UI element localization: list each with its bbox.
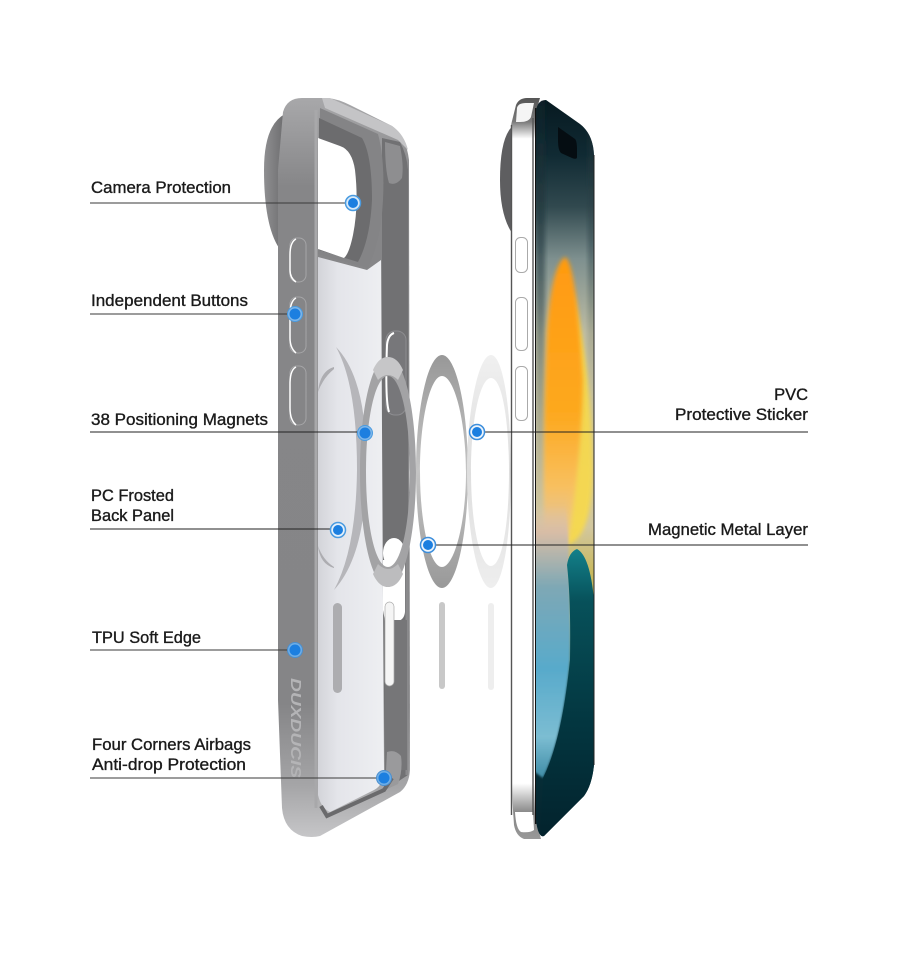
- sticker capsule: [488, 603, 494, 690]
- screen: [536, 100, 594, 836]
- magnet ring: [360, 357, 416, 587]
- screen punch hole: [558, 127, 577, 159]
- callout: Magnetic Metal Layer: Magnetic Metal Layer: [648, 521, 809, 539]
- top lip highlight: [322, 98, 408, 150]
- phone case: [264, 98, 410, 837]
- side button middle: [290, 297, 306, 353]
- case frame: [278, 98, 410, 837]
- camera ring inner: [319, 118, 372, 262]
- side button top: [290, 238, 306, 282]
- panel lower left crescent: [318, 546, 334, 568]
- magnet ring top shine: [373, 357, 403, 380]
- brand logo: DUXDUCIS: [287, 678, 304, 778]
- inner button highlight: [386, 333, 394, 412]
- white capsule: [385, 602, 394, 686]
- panel upper left crescent: [318, 367, 334, 392]
- callout: PVC Protective Sticker: [470, 386, 809, 440]
- phone button top: [516, 238, 528, 272]
- sticker ring: [467, 355, 511, 588]
- right inner side band: [382, 138, 408, 790]
- blue wallpaper shape: [536, 511, 570, 779]
- white strip below magnet: [383, 560, 405, 621]
- camera ring: [318, 108, 383, 268]
- side button middle highlight: [290, 298, 296, 353]
- screen right edge: [593, 155, 595, 765]
- phone camera bump: [500, 125, 514, 233]
- magnet ring bottom shine: [373, 564, 403, 587]
- callout: Four Corners Airbags: Anti-drop Protection: [92, 756, 246, 774]
- phone button middle: [516, 298, 528, 350]
- metal capsule: [439, 602, 445, 689]
- side lines: [512, 118, 533, 815]
- panel magnetic crescent: [334, 347, 366, 590]
- callout: Independent Buttons: Independent Buttons: [91, 292, 248, 310]
- screen edge: [535, 108, 537, 824]
- panel capsule: [333, 603, 342, 693]
- yellow highlight: [566, 290, 593, 545]
- side button bottom highlight: [290, 367, 296, 425]
- magnet ring body: [360, 357, 416, 587]
- side button top highlight: [290, 239, 296, 282]
- corner airbag: [385, 751, 402, 790]
- screen background: [536, 100, 594, 836]
- orange wallpaper shape: [544, 257, 583, 545]
- phone: [500, 95, 600, 840]
- infographic: [90, 98, 808, 839]
- metal ring: [416, 355, 468, 588]
- bottom lip: [321, 778, 392, 816]
- phone button bottom: [516, 366, 528, 420]
- callout: PVC Protective Sticker: PVC: [774, 386, 808, 404]
- hole at strip bottom: [383, 538, 405, 568]
- callout: 38 Positioning Magnets: 38 Positioning Magnets: [91, 411, 268, 429]
- camera opening: [318, 138, 357, 258]
- callout: PC Frosted Back Panel: Back Panel: [91, 507, 174, 525]
- callout: Four Corners Airbags: [90, 736, 392, 786]
- callout: Four Corners Airbags: Four Corners Airbags: [92, 736, 251, 754]
- callout: PC Frosted Back Panel: [90, 487, 346, 538]
- left frame highlight: [314, 110, 318, 808]
- callout: 38 Positioning Magnets: [90, 411, 372, 440]
- callout: Magnetic Metal Layer: [420, 521, 809, 552]
- callout: PVC Protective Sticker: Protective Sticker: [675, 406, 809, 424]
- phone side top window: [516, 103, 534, 122]
- camera hinge corner: [385, 142, 403, 184]
- callout: Camera Protection: Camera Protection: [91, 179, 231, 197]
- left vignette: [536, 100, 545, 520]
- strip right edge: [406, 540, 408, 775]
- inner side button: [386, 331, 406, 415]
- case camera bump: [264, 114, 285, 248]
- right vignette: [588, 100, 595, 400]
- phone side bottom window: [515, 812, 534, 832]
- callout: Camera Protection: [90, 179, 360, 210]
- back panel: [318, 257, 384, 812]
- phone side: [511, 98, 541, 839]
- lower strip frame: [385, 620, 407, 770]
- side button bottom: [290, 366, 306, 425]
- teal wallpaper shape: [540, 549, 594, 840]
- callout: TPU Soft Edge: TPU Soft Edge: [92, 629, 201, 647]
- callout: TPU Soft Edge: [90, 629, 302, 658]
- callout: Independent Buttons: [90, 292, 302, 322]
- callout: PC Frosted Back Panel: PC Frosted: [91, 487, 174, 505]
